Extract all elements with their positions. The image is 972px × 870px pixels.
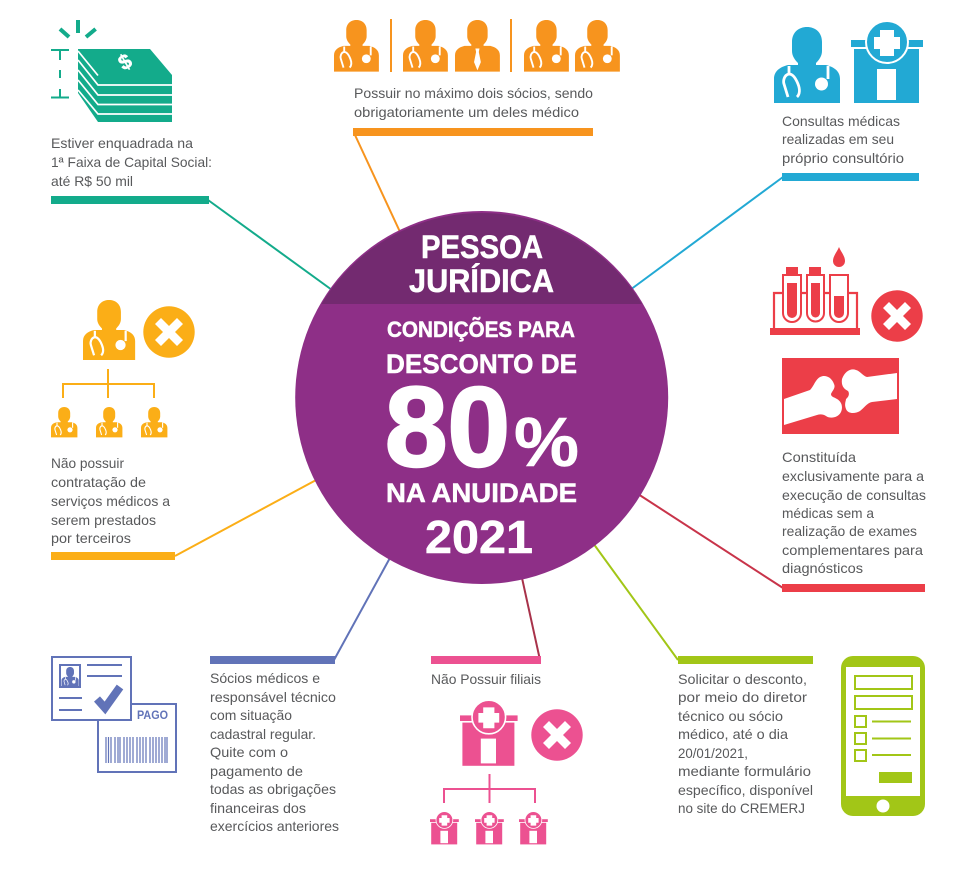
text: condicoes para desconto bbox=[386, 317, 577, 379]
icon: money stack bbox=[51, 20, 172, 122]
text: exames: realização de exames bbox=[782, 523, 917, 539]
icon: money stack: $ bbox=[114, 49, 136, 75]
text: terceiros: Não possuir bbox=[51, 455, 124, 471]
text: exames: exclusivamente para a bbox=[782, 468, 924, 484]
icon: doctors group bbox=[334, 19, 620, 72]
text: situacao regular: com situação bbox=[210, 707, 292, 723]
text: capital social: até R$ 50 mil bbox=[51, 173, 133, 189]
text: consultorio: próprio consultório bbox=[782, 150, 904, 166]
connector line: red bbox=[638, 494, 783, 588]
text: capital social bbox=[51, 135, 212, 189]
bar: teal bbox=[51, 196, 209, 204]
text: socios: Possuir no máximo dois sócios, sendo bbox=[354, 85, 593, 101]
heading: pessoa juridica: PESSOA bbox=[421, 229, 543, 265]
panel: terceiros bbox=[51, 300, 195, 560]
bar: green bbox=[678, 656, 813, 664]
text: consultorio bbox=[782, 113, 904, 166]
text: situacao regular: cadastral regular. bbox=[210, 726, 316, 742]
text: terceiros: serviços médicos a bbox=[51, 493, 170, 509]
big number: 80%: 80 bbox=[385, 364, 510, 490]
text: exames: Constituída bbox=[782, 449, 856, 465]
text: situacao regular: Sócios médicos e bbox=[210, 670, 320, 686]
connector line: yellow bbox=[175, 479, 318, 556]
text: na anuidade 2021 bbox=[386, 478, 577, 563]
text: solicitar desconto bbox=[678, 671, 813, 816]
text: condicoes para desconto: CONDIÇÕES PARA bbox=[387, 317, 575, 342]
text: solicitar desconto: médico, até o dia bbox=[678, 726, 788, 742]
heading: pessoa juridica bbox=[409, 229, 554, 299]
panel: filiais bbox=[430, 656, 583, 844]
bar: orange bbox=[353, 128, 593, 136]
panel: situacao regular bbox=[52, 656, 339, 834]
central circle bbox=[295, 211, 668, 584]
text: solicitar desconto: 20/01/2021, bbox=[678, 745, 748, 761]
big number: 80% bbox=[385, 364, 579, 490]
icon: doctor and clinic bbox=[774, 21, 923, 103]
text: terceiros: por terceiros bbox=[51, 530, 131, 546]
bar: red bbox=[782, 584, 925, 592]
connector line: orange bbox=[355, 135, 401, 234]
text: socios bbox=[354, 85, 593, 120]
text: solicitar desconto: por meio do diretor bbox=[678, 689, 807, 705]
bar: pink bbox=[431, 656, 541, 664]
text: solicitar desconto: técnico ou sócio bbox=[678, 708, 783, 724]
text: socios: obrigatoriamente um deles médico bbox=[354, 104, 579, 120]
connector line: blue bbox=[630, 177, 783, 290]
big number: 80%: % bbox=[514, 403, 579, 481]
text: situacao regular: todas as obrigações bbox=[210, 781, 336, 797]
panel: socios bbox=[334, 19, 620, 136]
text: exames: diagnósticos bbox=[782, 560, 863, 576]
heading: pessoa juridica: JURÍDICA bbox=[409, 263, 554, 299]
text: filiais: Não Possuir filiais bbox=[431, 671, 541, 687]
text: exames: complementares para bbox=[782, 542, 923, 558]
circle top band bbox=[322, 213, 642, 304]
connector line: periwinkle bbox=[334, 556, 391, 660]
bar: yellow bbox=[51, 552, 175, 560]
text: exames bbox=[782, 449, 926, 576]
panel: capital social bbox=[51, 20, 212, 204]
text: exames: médicas sem a bbox=[782, 505, 874, 521]
panel: consultorio bbox=[774, 21, 923, 181]
text: terceiros bbox=[51, 455, 170, 546]
icon: x mark pink bbox=[531, 709, 583, 761]
icon: clinic hierarchy bbox=[430, 700, 548, 844]
icon: test tubes bbox=[770, 247, 860, 335]
text: terceiros: contratação de bbox=[51, 474, 146, 490]
connector line: green bbox=[593, 543, 678, 660]
text: situacao regular: Quite com o bbox=[210, 744, 288, 760]
bar: blue bbox=[782, 173, 919, 181]
icon: bone bbox=[782, 358, 899, 434]
text: situacao regular: pagamento de bbox=[210, 763, 303, 779]
icon: x mark red bbox=[871, 290, 923, 342]
text: solicitar desconto: no site do CREMERJ bbox=[678, 800, 805, 816]
text: solicitar desconto: mediante formulário bbox=[678, 763, 811, 779]
icon: card and receipt bbox=[52, 657, 176, 772]
text: capital social: Estiver enquadrada na bbox=[51, 135, 193, 151]
text: situacao regular: responsável técnico bbox=[210, 689, 336, 705]
text: solicitar desconto: específico, disponível bbox=[678, 782, 813, 798]
icon: x mark yellow bbox=[143, 306, 195, 358]
text: solicitar desconto: Solicitar o desconto, bbox=[678, 671, 807, 687]
text: situacao regular bbox=[210, 670, 339, 834]
text: exames: execução de consultas bbox=[782, 487, 926, 503]
text: condicoes para desconto: DESCONTO DE bbox=[386, 349, 577, 379]
text: na anuidade 2021: 2021 bbox=[425, 511, 533, 563]
icon: card and receipt: PAGO bbox=[137, 710, 168, 722]
icon: doctor hierarchy bbox=[51, 300, 167, 437]
text: na anuidade 2021: NA ANUIDADE bbox=[386, 478, 577, 508]
panel: solicitar desconto bbox=[678, 656, 925, 816]
connector line: teal bbox=[208, 200, 332, 290]
text: capital social: 1ª Faixa de Capital Social: bbox=[51, 154, 212, 170]
text: situacao regular: exercícios anteriores bbox=[210, 818, 339, 834]
text: situacao regular: financeiras dos bbox=[210, 800, 306, 816]
bar: periwinkle bbox=[210, 656, 335, 664]
connector line: dark red bbox=[522, 578, 540, 660]
text: consultorio: realizadas em seu bbox=[782, 131, 894, 147]
text: consultorio: Consultas médicas bbox=[782, 113, 900, 129]
panel: exames bbox=[770, 247, 926, 592]
text: terceiros: serem prestados bbox=[51, 512, 156, 528]
icon: smartphone form bbox=[841, 656, 925, 816]
